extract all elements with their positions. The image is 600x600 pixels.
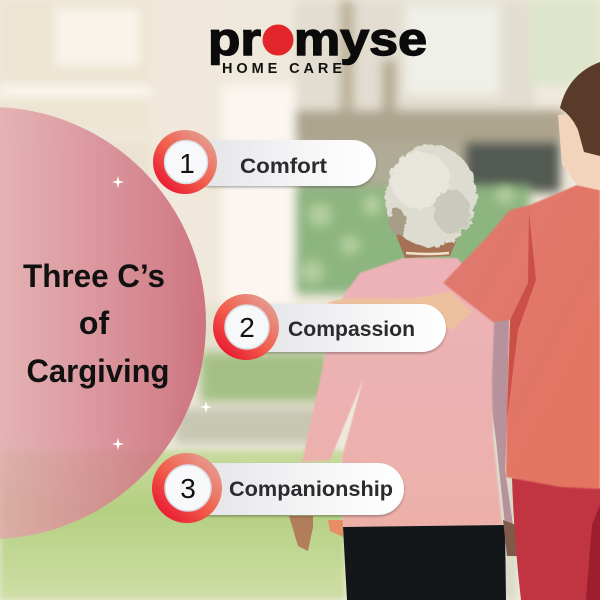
- woman hair: [385, 145, 477, 247]
- callout: 3 Companionship: Companionship: [229, 478, 393, 501]
- logo: Promyse Home Care: [208, 13, 427, 77]
- caregiver pants: [512, 478, 600, 600]
- caregiver sleeve shading: [507, 213, 536, 420]
- callout: 3 Companionship: 3: [180, 473, 196, 504]
- caregiver neck: [558, 110, 600, 190]
- panel: Three C's circle: [0, 107, 206, 539]
- icon: sparkle 1: [112, 176, 124, 188]
- callout: 2 Compassion: Compassion: [288, 318, 415, 341]
- caregiver arm: [327, 291, 472, 330]
- heading: Three C's of Cargiving: of: [79, 305, 109, 341]
- woman lower hem tint: [328, 520, 343, 537]
- logo: Promyse Home Care: myse: [294, 13, 427, 65]
- woman pants: [343, 525, 506, 600]
- woman neck: [392, 225, 460, 258]
- heading: Three C's of Cargiving: Cargiving: [26, 353, 170, 389]
- icon: sparkle 3: [112, 438, 124, 450]
- woman right hand: [503, 520, 517, 556]
- hedge highlights: [300, 186, 514, 284]
- logo: Promyse Home Care: pr: [208, 13, 261, 65]
- callout: 1 Comfort: 1: [179, 148, 195, 179]
- icon: logo red dot: [262, 24, 294, 56]
- callout: 2 Compassion: [213, 294, 446, 360]
- woman right sleeve: [488, 300, 513, 525]
- woman left hand: [289, 516, 313, 551]
- callout: 2 Compassion: 2: [239, 312, 255, 343]
- logo: Promyse Home Care: HOME CARE: [222, 61, 342, 77]
- callout: 1 Comfort: [153, 130, 376, 194]
- callout: 1 Comfort: Comfort: [240, 155, 327, 178]
- callout: 3 Companionship: [152, 453, 404, 523]
- caregiver hair: [560, 62, 600, 156]
- icon: sparkle 2: [200, 401, 212, 413]
- photo: caregiver and elderly woman: [289, 62, 600, 600]
- woman top: [302, 258, 502, 529]
- caregiver shirt: [443, 185, 600, 489]
- heading: Three C's of Cargiving: [23, 258, 170, 389]
- heading: Three C's of Cargiving: Three C’s: [23, 258, 165, 294]
